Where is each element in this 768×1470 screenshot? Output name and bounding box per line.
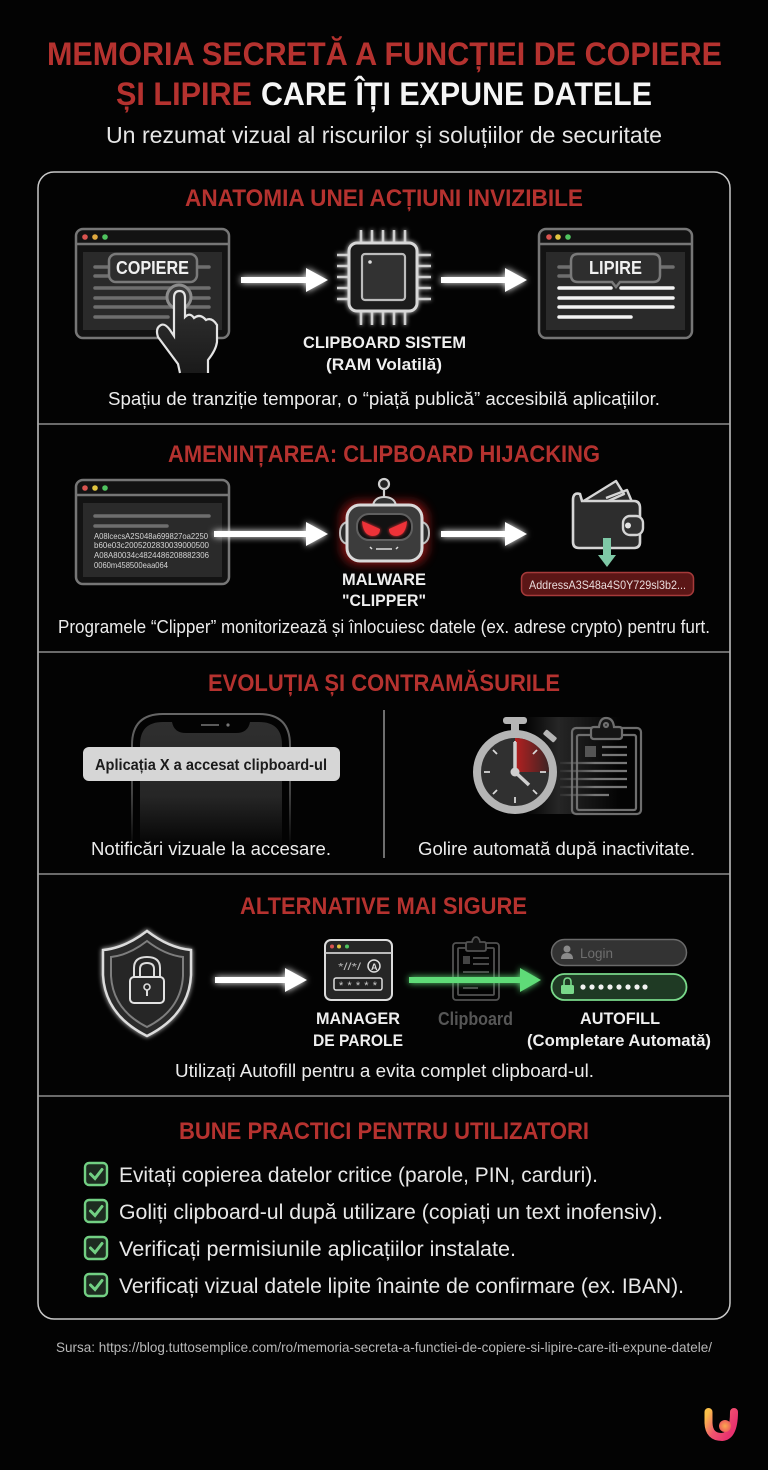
icon: address window: A08lcecsA2S048a699827oa2250: [94, 531, 208, 541]
icon: password manager: *//*/: [338, 962, 361, 973]
arrow: [215, 968, 307, 992]
label: clipboard system: CLIPBOARD SISTEM: [303, 333, 466, 352]
arrow: [241, 268, 328, 292]
icon: paste window: LIPIRE: [589, 258, 642, 278]
notification: Aplicația X a accesat clipboard-ul: [95, 757, 327, 774]
icon: address window: 0060m458500eaa064: [94, 560, 168, 570]
icon: check 4: [85, 1274, 107, 1296]
practice 1: Evitați copierea datelor critice (parole, PIN, carduri).: [119, 1164, 598, 1187]
icon: clipboard bypassed: [453, 937, 499, 1000]
icon: hand: [157, 291, 217, 373]
label: password manager: [313, 1009, 403, 1050]
label: clipboard system: (RAM Volatilă): [326, 355, 442, 374]
icon: check 3: [85, 1237, 107, 1259]
panel: threat: [58, 441, 710, 637]
caption: Notificări vizuale la accesare.: [91, 839, 331, 859]
icon: copy window: COPIERE: [116, 258, 189, 278]
icon: phone: [132, 714, 290, 845]
label: malware: [342, 570, 426, 610]
label: password manager: DE PAROLE: [313, 1031, 403, 1050]
icon: address window: [76, 480, 229, 584]
caption: Utilizați Autofill pentru a evita complet clipboard-ul.: [175, 1061, 594, 1081]
practice 3: Verificați permisiunile aplicațiilor instalate.: [119, 1238, 516, 1261]
label: autofill: (Completare Automată): [527, 1031, 711, 1050]
heading: anatomy: ANATOMIA UNEI ACȚIUNI INVIZIBILE: [185, 185, 583, 212]
subtitle: Un rezumat vizual al riscurilor și soluțiilor de securitate: [106, 122, 662, 148]
panel: alternatives: [103, 893, 711, 1081]
label: clipboard: Clipboard: [438, 1009, 513, 1029]
icon: password manager: *****: [339, 980, 378, 992]
label: malware: MALWARE: [342, 570, 426, 589]
login field: Login: [580, 945, 613, 961]
heading: evolution: EVOLUȚIA ȘI CONTRAMĂSURILE: [208, 669, 560, 697]
title: ȘI LIPIRE: [116, 76, 252, 112]
practice 2: Goliți clipboard-ul după utilizare (copiați un text inofensiv).: [119, 1201, 663, 1224]
arrow: green: [409, 968, 541, 992]
icon: password manager: [325, 940, 392, 1000]
panel: best practices: [85, 1118, 684, 1298]
icon: address window: b60e03c2005202830039000500: [94, 540, 209, 550]
panel: evolution: [83, 669, 695, 859]
label: password manager: MANAGER: [316, 1009, 400, 1028]
arrow: [214, 522, 328, 546]
notification: [83, 747, 340, 781]
address box: AddressA3S48a4S0Y729sl3b2...: [529, 578, 686, 592]
title: CARE ÎȚI EXPUNE DATELE: [261, 76, 652, 112]
label: autofill: [527, 1009, 711, 1050]
icon: stopwatch: [477, 717, 557, 810]
icon: copy window: [76, 229, 229, 373]
icon: paste window: [539, 229, 692, 338]
label: autofill: AUTOFILL: [580, 1009, 660, 1028]
practice 4: Verificați vizual datele lipite înainte de confirmare (ex. IBAN).: [119, 1275, 684, 1298]
icon: check 1: [85, 1163, 107, 1185]
label: clipboard system: [303, 333, 466, 374]
caption: Programele “Clipper” monitorizează și înlocuiesc datele (ex. adrese crypto) pentru furt.: [58, 617, 710, 637]
icon: clipboard fading: [525, 717, 641, 814]
caption: Spațiu de tranziție temporar, o “piață publică” accesibilă aplicațiilor.: [108, 389, 660, 409]
icon: address window: A08A80034c4824486208882306: [94, 550, 209, 560]
icon: malware robot: [340, 479, 429, 565]
panel: anatomy: [76, 185, 692, 409]
arrow: [441, 522, 527, 546]
heading: alternatives: ALTERNATIVE MAI SIGURE: [240, 893, 527, 920]
heading: best practices: BUNE PRACTICI PENTRU UTILIZATORI: [179, 1118, 589, 1145]
arrow: [441, 268, 527, 292]
address box: [522, 572, 694, 596]
password field: [552, 974, 686, 1000]
main panel frame: [38, 172, 730, 1319]
label: malware: "CLIPPER": [342, 591, 426, 610]
icon: chip: [337, 230, 431, 325]
title: [47, 36, 722, 112]
source: Sursa: https://blog.tuttosemplice.com/ro/memoria-secreta-a-functiei-de-copiere-si-lipire-care-iti-expune-datele/: [56, 1339, 712, 1355]
title: MEMORIA SECRETĂ A FUNCȚIEI DE COPIERE: [47, 36, 722, 72]
heading: threat: AMENINȚAREA: CLIPBOARD HIJACKING: [168, 441, 600, 468]
icon: wallet: [573, 481, 643, 567]
icon: check 2: [85, 1200, 107, 1222]
icon: password manager: A: [371, 962, 378, 972]
logo: [708, 1412, 734, 1437]
login field: [552, 940, 686, 966]
caption: Golire automată după inactivitate.: [418, 839, 695, 859]
icon: shield: [103, 931, 191, 1036]
